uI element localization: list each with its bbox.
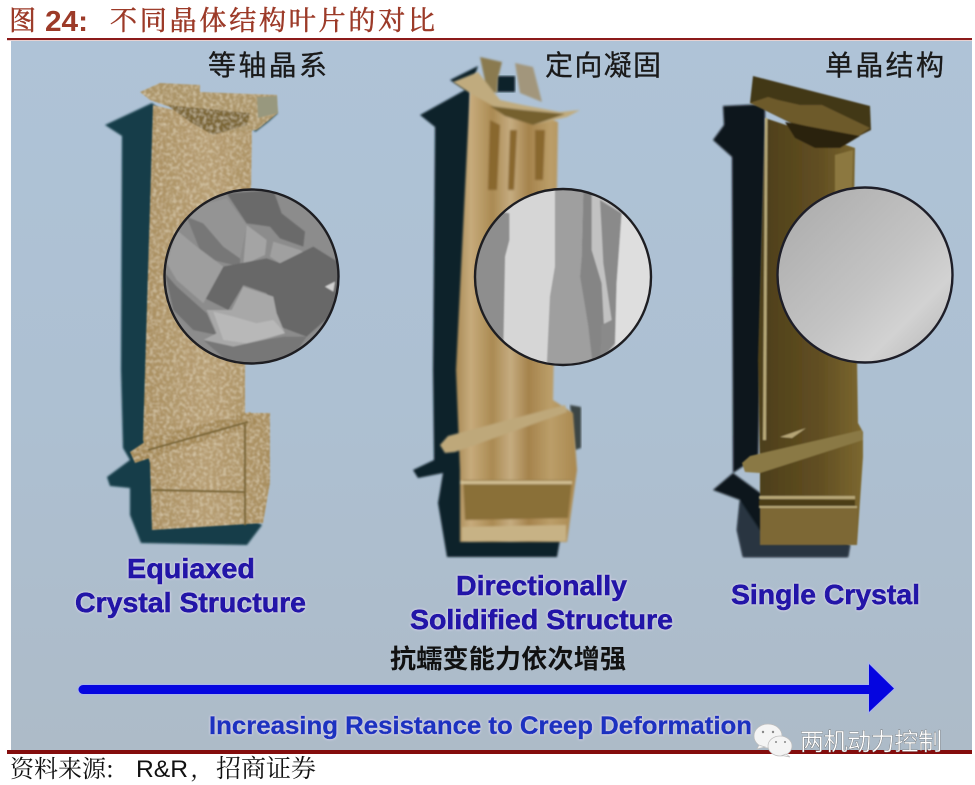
label: 等轴晶系: 等轴晶系 — [208, 50, 327, 81]
source note: R&R — [136, 756, 188, 783]
label: equiaxed crystal structure — [75, 553, 306, 618]
label: single crystal: Single Crystal — [731, 579, 920, 610]
icon: wechat watermark — [754, 724, 792, 757]
label: 单晶结构: 单晶结构 — [825, 50, 944, 81]
source note — [10, 749, 316, 785]
source note: 资料来源: — [10, 749, 114, 784]
label: directionally solidified structure: Directionally — [456, 570, 627, 601]
label: directionally solidified structure: Solidified Structure — [410, 604, 673, 635]
inset ring: equiaxed — [164, 190, 338, 364]
label: 抗蠕变能力依次增强: 抗蠕变能力依次增强 — [390, 644, 626, 674]
heading: 24: — [45, 6, 88, 38]
source note: 招商证券 — [216, 749, 316, 785]
heading: 不同晶体结构叶片的对比 — [110, 0, 435, 38]
label: 定向凝固: 定向凝固 — [545, 50, 661, 81]
watermark text: 两机动力控制 — [800, 729, 942, 756]
inset: single crystal — [778, 188, 952, 362]
label: equiaxed crystal structure: Equiaxed — [127, 553, 255, 584]
inset: equiaxed grains — [164, 189, 340, 367]
source note: , — [190, 749, 198, 785]
blade: directionally solidified — [413, 57, 581, 557]
inset: directional grains — [476, 190, 650, 364]
heading: 图 — [9, 0, 36, 38]
label: directionally solidified structure — [410, 570, 673, 635]
label: increasing resistance to creep deformation: Increasing Resistance to Creep Deformation — [209, 712, 752, 740]
label: equiaxed crystal structure: Crystal Structure — [75, 587, 306, 618]
inset ring: directional — [475, 189, 651, 365]
blade: equiaxed — [105, 83, 278, 545]
arrow: increasing resistance — [78, 664, 894, 712]
blade: single crystal — [713, 76, 871, 557]
